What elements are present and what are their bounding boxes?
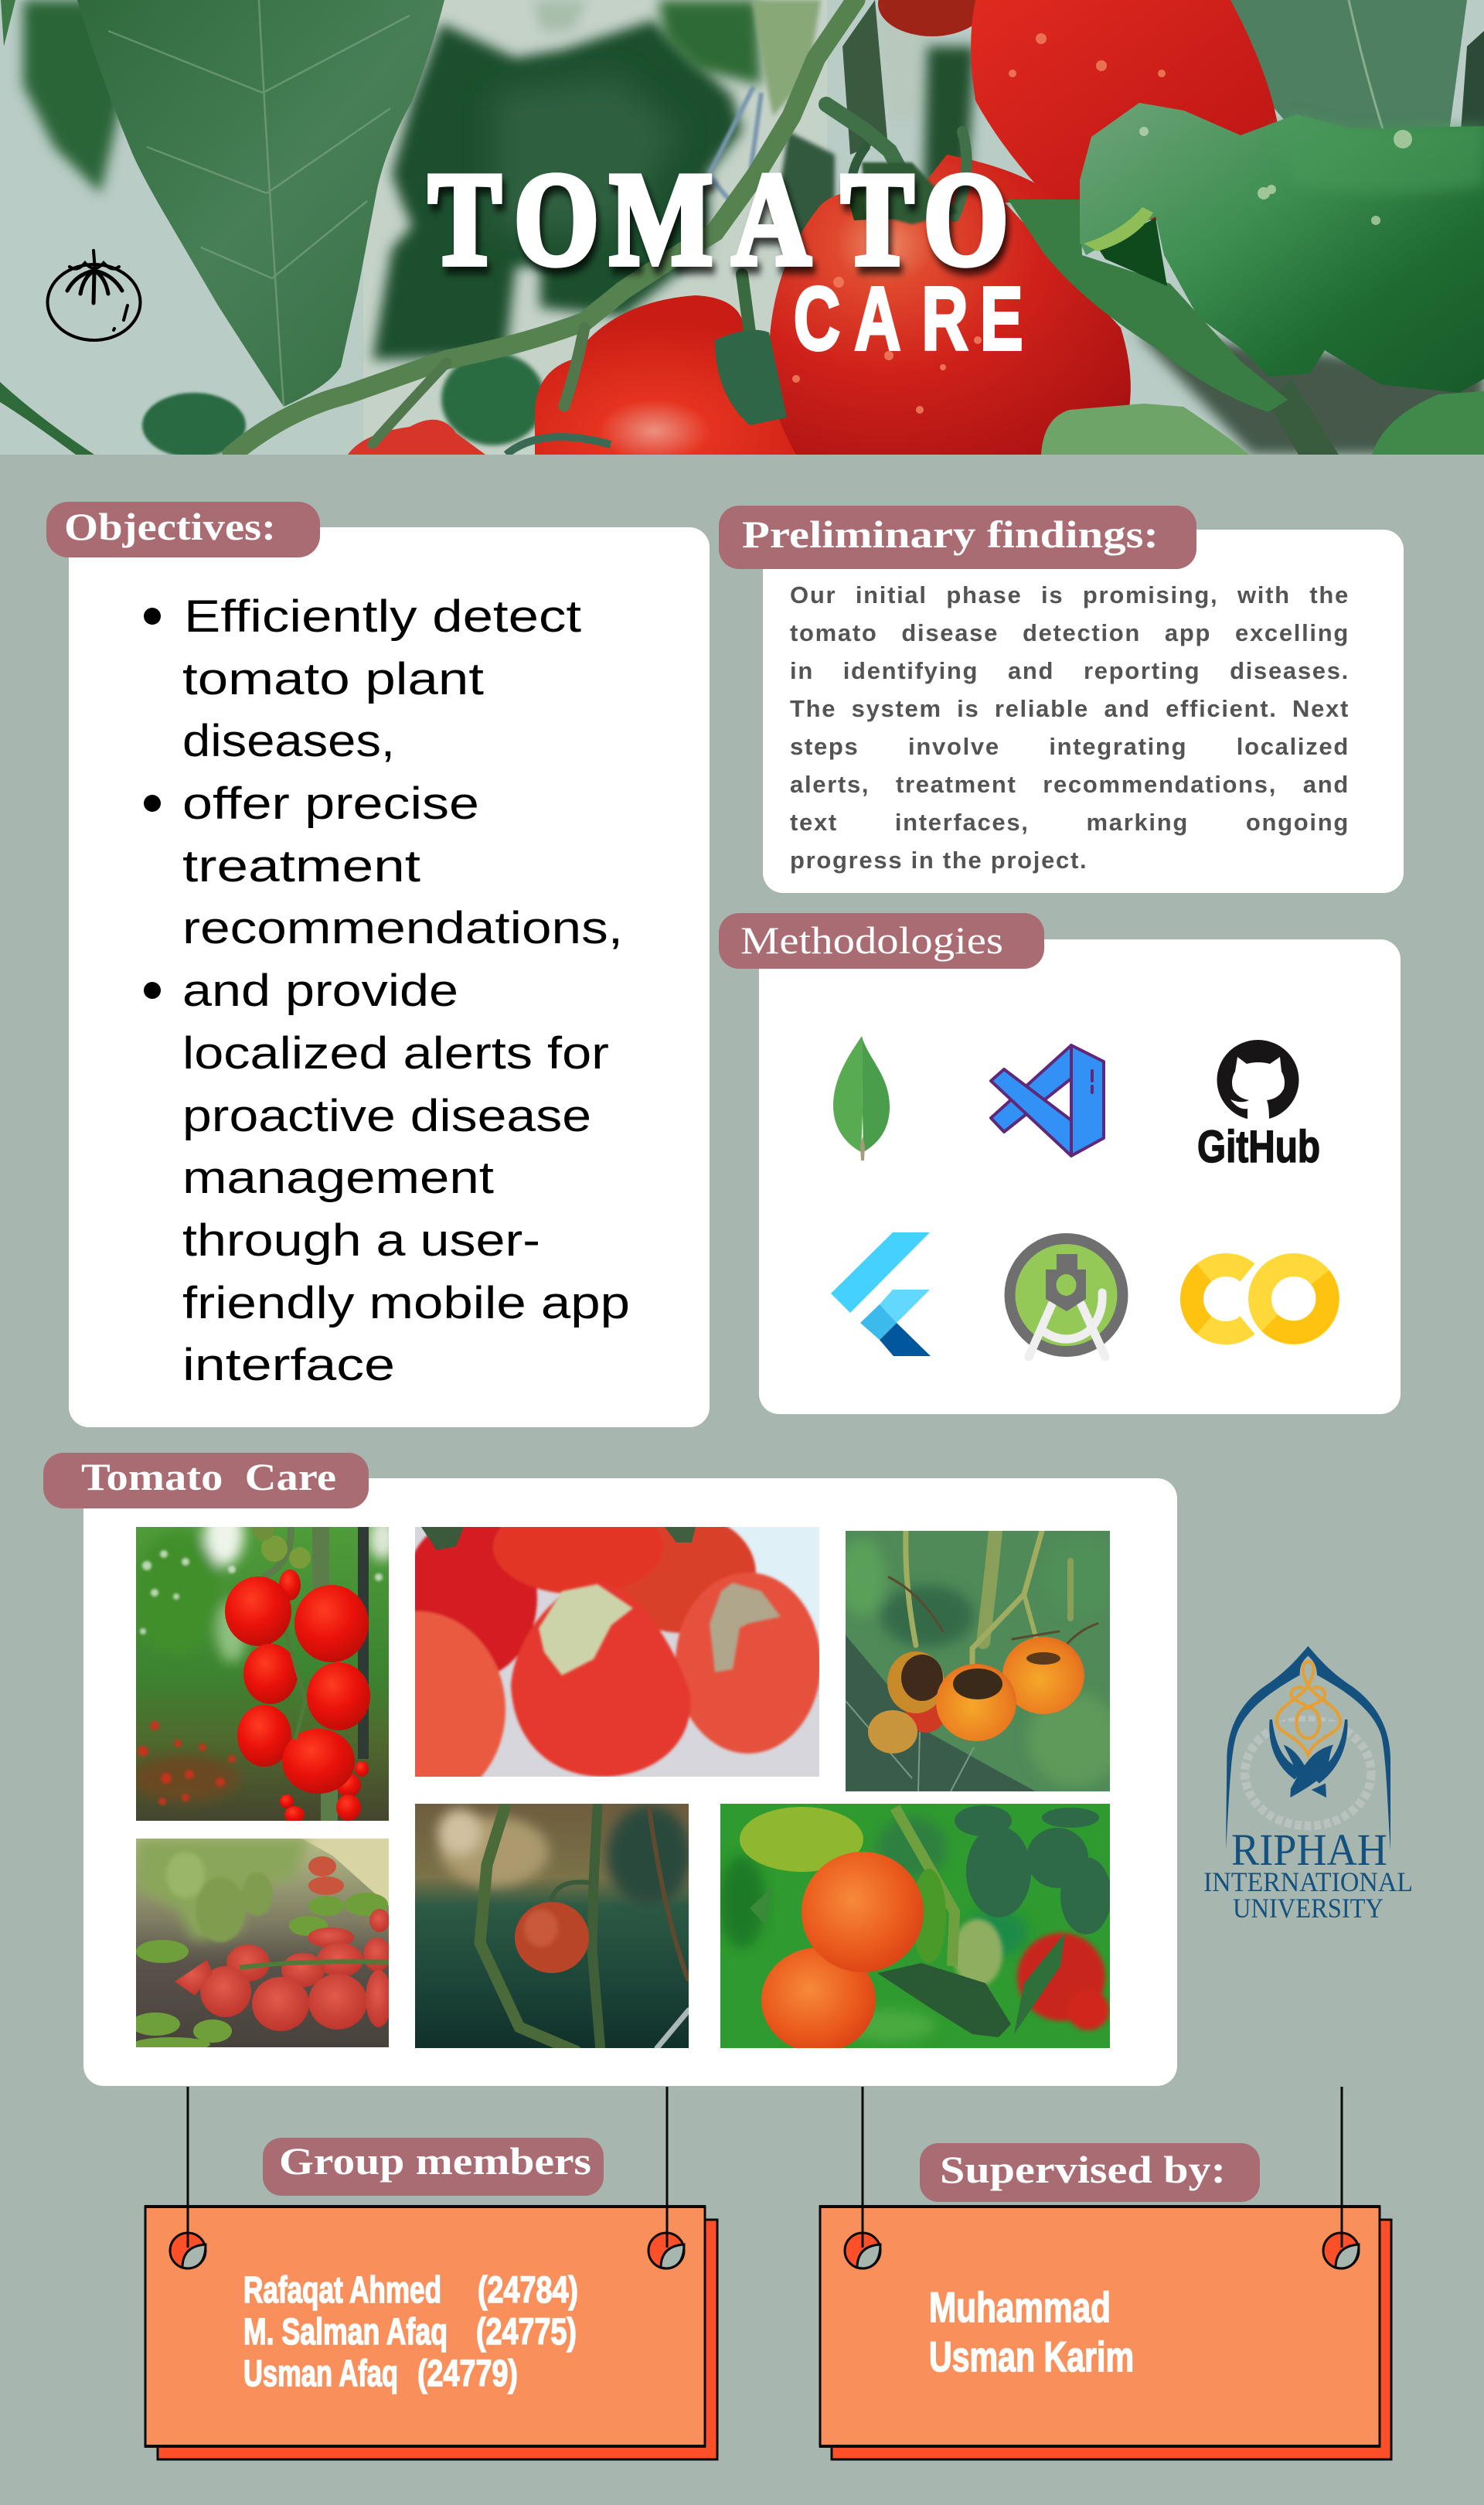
right tomato xyxy=(971,0,1278,232)
objectives heading: Objectives: xyxy=(64,505,276,548)
group heading: Group members xyxy=(279,2139,591,2183)
group members names: M. Salman Afaq xyxy=(243,2312,448,2353)
findings card xyxy=(763,530,1404,893)
findings paragraph: tomato disease detection app excelling xyxy=(790,619,1350,646)
findings paragraph: The system is reliable and efficient. Next xyxy=(790,695,1350,722)
panel: objectives xyxy=(46,502,710,1427)
objectives bullet list xyxy=(144,591,630,1390)
small bottom tomato xyxy=(348,420,485,455)
objectives bullet list: diseases, xyxy=(182,716,395,766)
photo: rotting tomato on branch xyxy=(415,1804,689,2048)
droplets xyxy=(792,33,1166,414)
methodologies heading xyxy=(719,913,1044,969)
objectives bullet list: proactive disease xyxy=(182,1091,591,1141)
group members names xyxy=(243,2270,578,2394)
methodologies heading: Methodologies xyxy=(740,918,1003,962)
supervisor card front xyxy=(820,2207,1380,2446)
lower leaf xyxy=(1008,199,1288,412)
logo wordmark: RIPHAH xyxy=(1231,1825,1387,1875)
icon: GitHub logo: GitHub xyxy=(1197,1122,1320,1172)
panel: supervised by xyxy=(819,2087,1391,2459)
objectives heading xyxy=(46,502,320,557)
top right leaf xyxy=(1230,0,1467,155)
logo mark xyxy=(1226,1646,1390,1850)
objectives bullet list: management xyxy=(182,1153,494,1203)
hanging hole right xyxy=(648,2087,684,2268)
objectives bullet list: friendly mobile app xyxy=(182,1278,630,1328)
title word: TOMATO: TOMATO xyxy=(428,146,1008,293)
objectives bullet list: Efficiently detect xyxy=(184,591,581,642)
title word: CARE: CARE xyxy=(794,270,1023,369)
icon: GitHub logo xyxy=(1197,1040,1320,1172)
group members names: Rafaqat Ahmed xyxy=(243,2270,441,2311)
photos heading xyxy=(43,1453,369,1508)
objectives bullet list: recommendations, xyxy=(182,903,623,953)
left tomato xyxy=(535,295,819,455)
logo wordmark: UNIVERSITY xyxy=(1233,1893,1384,1924)
panel: methodologies xyxy=(719,913,1401,1414)
photo: tomatoes and basil on table xyxy=(136,1839,389,2047)
bottom leaves xyxy=(1041,404,1249,455)
icon: MongoDB leaf xyxy=(833,1036,890,1160)
photos heading: Tomato Care xyxy=(81,1455,336,1498)
photo: orange tomatoes among leaves xyxy=(720,1804,1110,2048)
findings heading xyxy=(719,506,1196,569)
calyx xyxy=(841,174,924,220)
methodologies card xyxy=(759,939,1401,1414)
findings paragraph: Our initial phase is promising, with the xyxy=(790,581,1350,608)
logo wordmark xyxy=(1203,1825,1413,1924)
findings heading: Preliminary findings: xyxy=(742,513,1159,556)
objectives bullet list: through a user- xyxy=(182,1215,540,1266)
supervisor heading: Supervised by: xyxy=(940,2148,1226,2191)
main leaf xyxy=(77,0,444,407)
group members names: (24784) xyxy=(478,2270,578,2311)
supervisor heading xyxy=(920,2143,1260,2202)
objectives bullet list: tomato plant xyxy=(182,654,484,704)
icon: Android Studio xyxy=(1005,1233,1128,1357)
photos card xyxy=(83,1478,1177,2086)
center tomato xyxy=(768,155,1131,455)
findings paragraph: steps involve integrating localized xyxy=(790,733,1350,760)
findings paragraph xyxy=(790,581,1350,874)
panel: tomato care photos xyxy=(43,1453,1177,2086)
group card front xyxy=(145,2207,705,2446)
hanging hole right xyxy=(1323,2087,1359,2268)
hero photo banner xyxy=(0,0,1484,455)
objectives bullet list: offer precise xyxy=(182,779,479,829)
findings paragraph: text interfaces, marking ongoing xyxy=(790,809,1350,836)
group members names: (24779) xyxy=(417,2353,518,2394)
panel: group members xyxy=(145,2087,717,2459)
objectives bullet list: and provide xyxy=(182,966,458,1016)
logo: Riphah International University xyxy=(1203,1646,1413,1924)
hanging hole left xyxy=(845,2087,880,2268)
supervisor name xyxy=(929,2283,1134,2381)
supervisor name: Usman Karim xyxy=(929,2333,1134,2381)
objectives bullet list: treatment xyxy=(182,841,420,891)
title: TOMATO CARE xyxy=(428,146,1023,369)
logo wordmark: INTERNATIONAL xyxy=(1203,1866,1413,1897)
front leaf xyxy=(1080,103,1484,393)
supervisor name: Muhammad xyxy=(929,2283,1111,2331)
stems xyxy=(232,0,967,455)
findings paragraph: alerts, treatment recommendations, and xyxy=(790,771,1350,798)
objectives card xyxy=(69,527,710,1427)
objectives bullet list: interface xyxy=(182,1340,395,1390)
group heading xyxy=(263,2138,604,2196)
group members names: (24775) xyxy=(476,2312,577,2353)
group card back layer xyxy=(158,2220,717,2459)
panel: preliminary findings xyxy=(719,506,1404,893)
findings paragraph: progress in the project. xyxy=(790,847,1087,874)
hanging hole left xyxy=(170,2087,206,2268)
gap behind lower right xyxy=(1136,332,1484,455)
photo: blighted tomatoes xyxy=(846,1531,1110,1791)
findings paragraph: in identifying and reporting diseases. xyxy=(790,657,1350,684)
top tomato small xyxy=(878,0,986,36)
icon: tomato outline xyxy=(48,250,141,340)
supervisor card back layer xyxy=(832,2220,1391,2459)
group members names: Usman Afaq xyxy=(243,2353,398,2394)
stem knot xyxy=(715,330,787,425)
photo: tomatoes with lesions xyxy=(415,1527,819,1777)
icon: Google Colab xyxy=(1192,1265,1328,1333)
icon: Flutter xyxy=(831,1232,931,1356)
objectives bullet list: localized alerts for xyxy=(182,1028,609,1079)
wire xyxy=(710,87,761,209)
icon: VS Code xyxy=(991,1045,1104,1156)
photo: ripe tomatoes on vine xyxy=(136,1527,389,1821)
